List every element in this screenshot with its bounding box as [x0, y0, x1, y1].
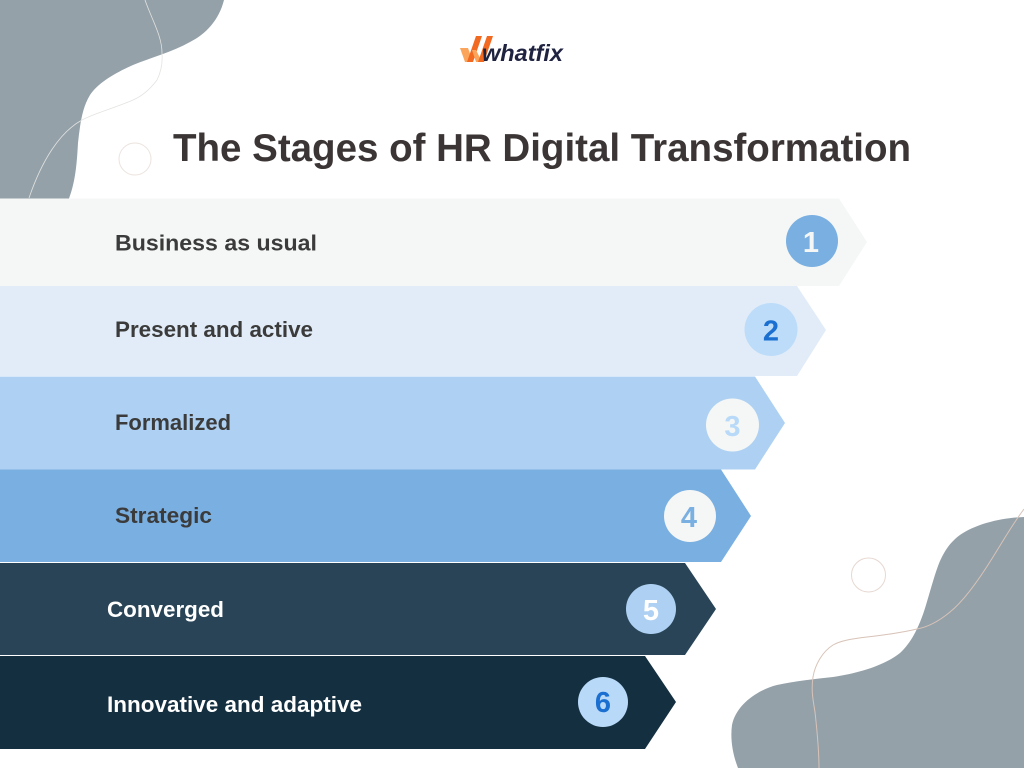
arrow band 5	[0, 563, 716, 655]
stage 5 badge: 5	[643, 595, 659, 627]
stage 3 badge: 3	[724, 411, 741, 443]
stage 1 badge: 1	[803, 227, 819, 259]
arrow band 3	[0, 376, 785, 470]
decorative ring: bottom right	[852, 558, 886, 592]
decorative ring: top left	[119, 143, 151, 175]
stage 4: strategic	[0, 470, 751, 562]
stage 5: converged	[0, 563, 716, 655]
stage 3: formalized	[0, 376, 785, 470]
stage 2 label: Present and active	[115, 317, 313, 342]
icon: whatfix chevrons	[460, 36, 493, 62]
logo wordmark: whatfix	[482, 40, 564, 66]
stage 1 label: Business as usual	[115, 230, 317, 256]
stage 3 label: Formalized	[115, 410, 231, 435]
stage 5 badge	[626, 584, 676, 634]
stage 2: present and active	[0, 286, 826, 376]
stage 3 badge	[706, 398, 759, 452]
arrow band 4	[0, 470, 751, 562]
stage 6: innovative and adaptive	[0, 656, 676, 749]
title: The Stages of HR Digital Transformation	[173, 127, 911, 170]
stage 6 badge	[578, 677, 628, 727]
stage 1: business as usual	[0, 198, 867, 286]
decorative blob: bottom right	[731, 509, 1024, 768]
logo: whatfix	[460, 36, 564, 66]
stage 2 badge	[744, 303, 798, 356]
stage 1 badge	[786, 215, 838, 267]
stage 6 badge: 6	[595, 687, 611, 719]
arrow band 1	[0, 198, 867, 286]
stage 4 badge: 4	[681, 502, 697, 534]
stage 4 badge	[664, 490, 716, 542]
stage 5 label: Converged	[107, 597, 224, 622]
stage 6 label: Innovative and adaptive	[107, 692, 362, 717]
arrow band 2	[0, 286, 826, 376]
decorative blob: top left	[0, 0, 224, 198]
stage 2 badge: 2	[763, 316, 779, 348]
stage 4 label: Strategic	[115, 503, 212, 528]
arrow band 6	[0, 656, 676, 749]
